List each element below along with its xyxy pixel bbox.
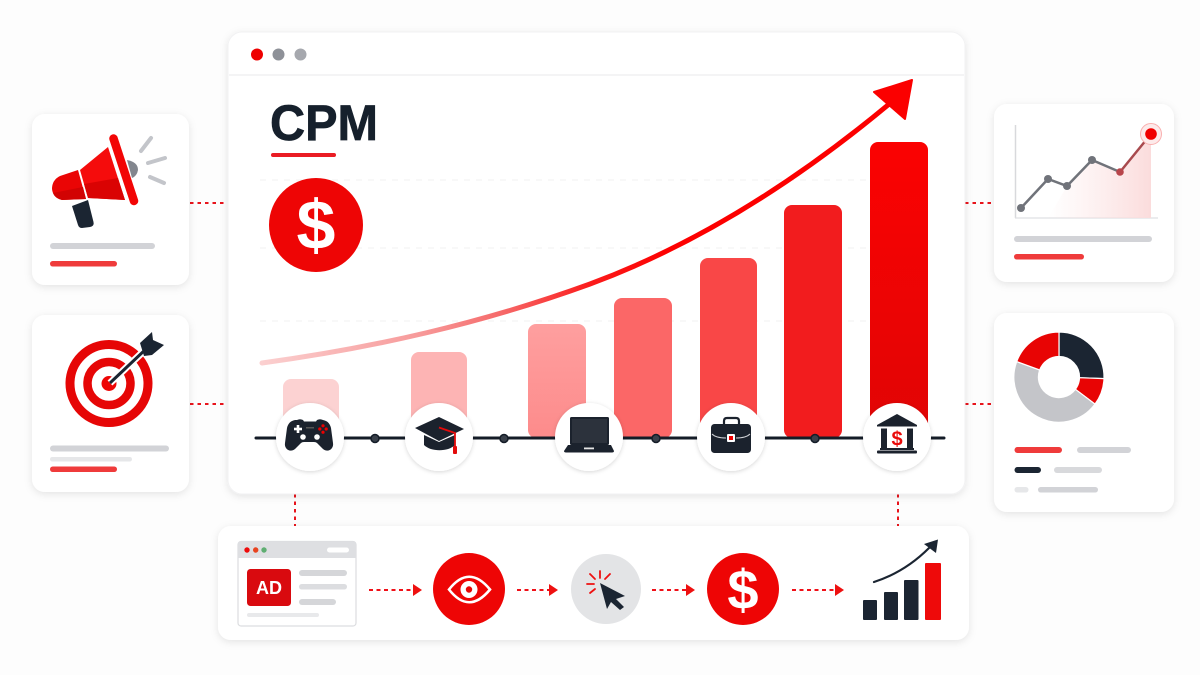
arrow: revenue to growth (792, 584, 844, 596)
arrow: view to click (517, 584, 558, 596)
icon: laptop (555, 403, 623, 471)
icon: briefcase (697, 403, 765, 471)
icon: megaphone (52, 138, 165, 228)
placeholder text lines (1014, 236, 1152, 260)
icon: graduation cap (405, 403, 473, 471)
icon: target with dart (70, 332, 164, 422)
line chart (1015, 124, 1162, 218)
icon: dollar (707, 553, 779, 625)
window dots (251, 48, 306, 60)
timeline axis (256, 434, 944, 442)
connector: left lower (190, 403, 228, 405)
ad browser window (238, 542, 356, 626)
connector: left upper (190, 202, 228, 204)
AD badge: AD (256, 578, 282, 598)
placeholder text lines (50, 446, 169, 472)
arrow: rising trend curve (262, 80, 912, 363)
icon: game controller (276, 403, 344, 471)
panel: megaphone card (32, 114, 189, 285)
panel: line chart card (994, 104, 1174, 282)
panel: main CPM browser window (228, 32, 965, 494)
icon: dollar coin: $ (297, 186, 335, 264)
icon: bank (863, 403, 931, 471)
icon: click cursor (571, 554, 641, 624)
placeholder text lines (50, 243, 155, 266)
arrow: ad to view (369, 584, 422, 596)
connector: right lower (965, 403, 994, 405)
panel: donut chart card (994, 313, 1174, 512)
connector: bottom right (897, 494, 899, 526)
icon: dollar: $ (727, 558, 759, 621)
legend (1014, 447, 1131, 492)
panel: bottom funnel strip (218, 526, 969, 640)
donut chart (1014, 332, 1104, 422)
connector: right upper (965, 202, 994, 204)
icon: eye (433, 553, 505, 625)
panel: target card (32, 315, 189, 492)
icon: dollar coin (269, 178, 363, 272)
icon: bank: $ (891, 428, 903, 450)
bar chart (283, 142, 928, 439)
title underline (271, 153, 336, 157)
icon: growth bars with arrow (863, 540, 941, 620)
arrow: click to revenue (652, 584, 695, 596)
title: CPM: CPM (270, 95, 378, 151)
connector: bottom left (294, 494, 296, 526)
